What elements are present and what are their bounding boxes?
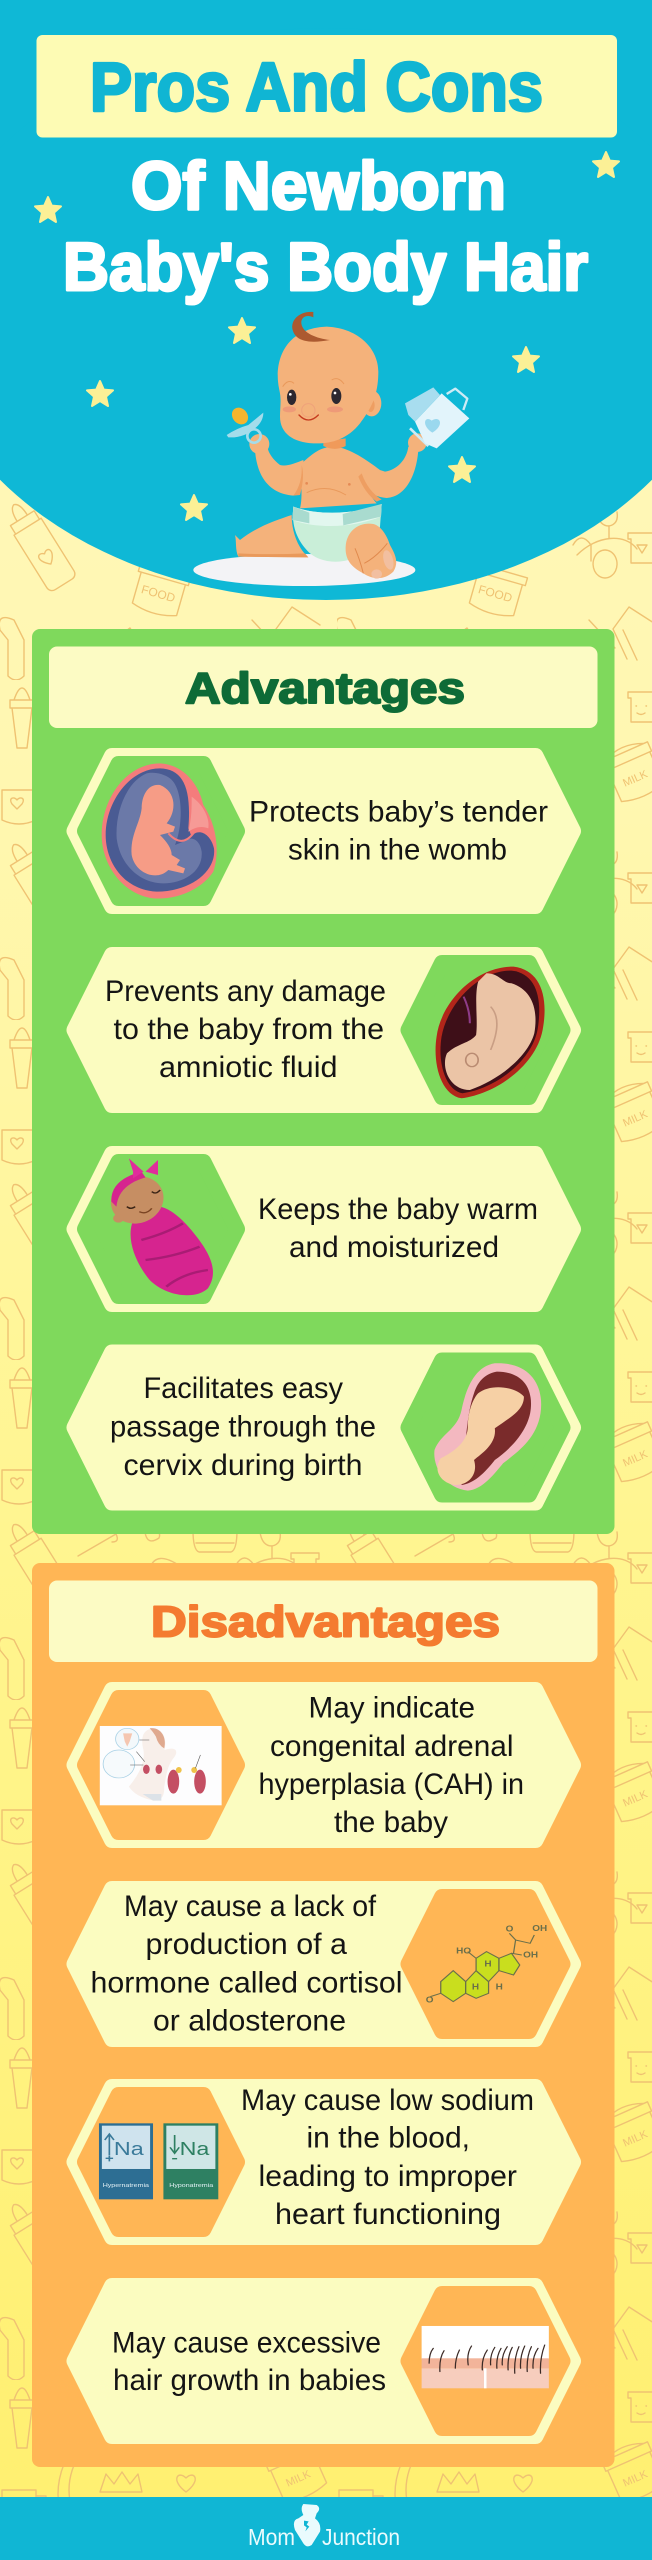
text: CAH line 3: hyperplasia (CAH) in bbox=[258, 1768, 524, 1801]
text: cortisol line 2: production of a bbox=[146, 1928, 347, 1961]
text: sodium line 4: heart functioning bbox=[275, 2198, 501, 2231]
text: sodium line 1: May cause low sodium bbox=[241, 2084, 534, 2117]
text: cortisol line 1: May cause a lack of bbox=[124, 1890, 377, 1923]
panel: advantages bbox=[32, 629, 614, 1534]
text: cortisol line 3: hormone called cortisol bbox=[90, 1966, 402, 2000]
icon: cortisol molecule: H bbox=[496, 1982, 503, 1991]
icon: hypernatremia and hyponatremia cards: Na bbox=[180, 2139, 210, 2159]
text: sodium line 2: in the blood, bbox=[306, 2122, 470, 2154]
logo: MomJunction bbox=[248, 2504, 400, 2550]
icon: skin with hair bbox=[422, 2326, 549, 2388]
icon: cortisol molecule: H bbox=[472, 1982, 479, 1991]
heading: disadvantages: Disadvantages bbox=[151, 1598, 500, 1646]
icon: cortisol molecule: OH bbox=[532, 1924, 547, 1933]
text: keeps line 2: and moisturized bbox=[289, 1231, 499, 1264]
heading: disadvantages bbox=[49, 1580, 598, 1662]
icon: full-term fetus bbox=[436, 967, 545, 1098]
icon: cortisol molecule: O bbox=[426, 1996, 434, 2004]
text: keeps line 1: Keeps the baby warm bbox=[258, 1193, 538, 1226]
text: CAH line 4: the baby bbox=[334, 1806, 448, 1839]
item: keeps warm bbox=[74, 1154, 573, 1304]
text: prevents line 1: Prevents any damage bbox=[105, 975, 386, 1008]
heading: advantages bbox=[49, 646, 598, 728]
footer bar bbox=[0, 2497, 652, 2560]
icon: cortisol molecule: H bbox=[484, 1960, 492, 1968]
stars bbox=[35, 152, 619, 520]
text: protects: Protects baby’s tender bbox=[249, 796, 548, 828]
item: prevents damage bbox=[74, 955, 573, 1105]
icon: swaddled baby bbox=[103, 1158, 213, 1295]
text: skin in the womb: skin in the womb bbox=[288, 834, 507, 866]
item: cortisol bbox=[74, 1889, 573, 2039]
icon: cortisol molecule bbox=[426, 1924, 547, 2004]
text: facilitates line 1: Facilitates easy bbox=[144, 1372, 343, 1405]
logo: MomJunction: Mom bbox=[248, 2524, 295, 2550]
logo: MomJunction: Junction bbox=[322, 2524, 400, 2550]
icon: cortisol molecule: OH bbox=[523, 1950, 538, 1959]
title line 1: Pros And Cons bbox=[90, 48, 543, 126]
icon: baby with pacifier and cup bbox=[193, 312, 469, 586]
item: low sodium bbox=[74, 2084, 573, 2237]
text: prevents line 2: to the baby from the bbox=[114, 1013, 384, 1046]
text: CAH line 2: congenital adrenal bbox=[270, 1730, 514, 1763]
icon: hypernatremia and hyponatremia cards: Hyponatremia bbox=[169, 2183, 214, 2189]
icon: adrenal diagram bbox=[100, 1726, 222, 1805]
item: excessive hair bbox=[74, 2286, 573, 2436]
heading: advantages: Advantages bbox=[185, 664, 465, 713]
text: prevents line 3: amniotic fluid bbox=[159, 1051, 338, 1084]
panel: disadvantages bbox=[32, 1563, 614, 2467]
item: protects skin bbox=[74, 756, 573, 906]
title line 2: Of Newborn bbox=[131, 148, 506, 224]
text: CAH line 1: May indicate bbox=[308, 1692, 475, 1724]
item: facilitates passage bbox=[74, 1352, 573, 1502]
icon: hypernatremia and hyponatremia cards: Hypernatremia bbox=[103, 2183, 149, 2189]
icon: baby in birth canal bbox=[434, 1363, 541, 1491]
icon: cortisol molecule: HO bbox=[456, 1946, 471, 1955]
icon: hypernatremia and hyponatremia cards bbox=[99, 2123, 218, 2199]
icon: cortisol molecule: O bbox=[506, 1925, 513, 1933]
text: sodium line 3: leading to improper bbox=[258, 2160, 517, 2193]
header blue shape bbox=[0, 0, 652, 600]
text: hair line 1: May cause excessive bbox=[112, 2326, 381, 2360]
item: CAH bbox=[74, 1690, 573, 1840]
text: hair line 2: hair growth in babies bbox=[113, 2364, 386, 2397]
text: facilitates line 2: passage through the bbox=[110, 1410, 376, 1444]
title box bbox=[36, 35, 617, 138]
title line 3: Baby's Body Hair bbox=[63, 229, 588, 305]
icon: fetus in womb bbox=[102, 763, 217, 899]
text: facilitates line 3: cervix during birth bbox=[124, 1449, 362, 1482]
icon: hypernatremia and hyponatremia cards: Na bbox=[114, 2139, 144, 2159]
text: cortisol line 4: or aldosterone bbox=[153, 2004, 346, 2038]
